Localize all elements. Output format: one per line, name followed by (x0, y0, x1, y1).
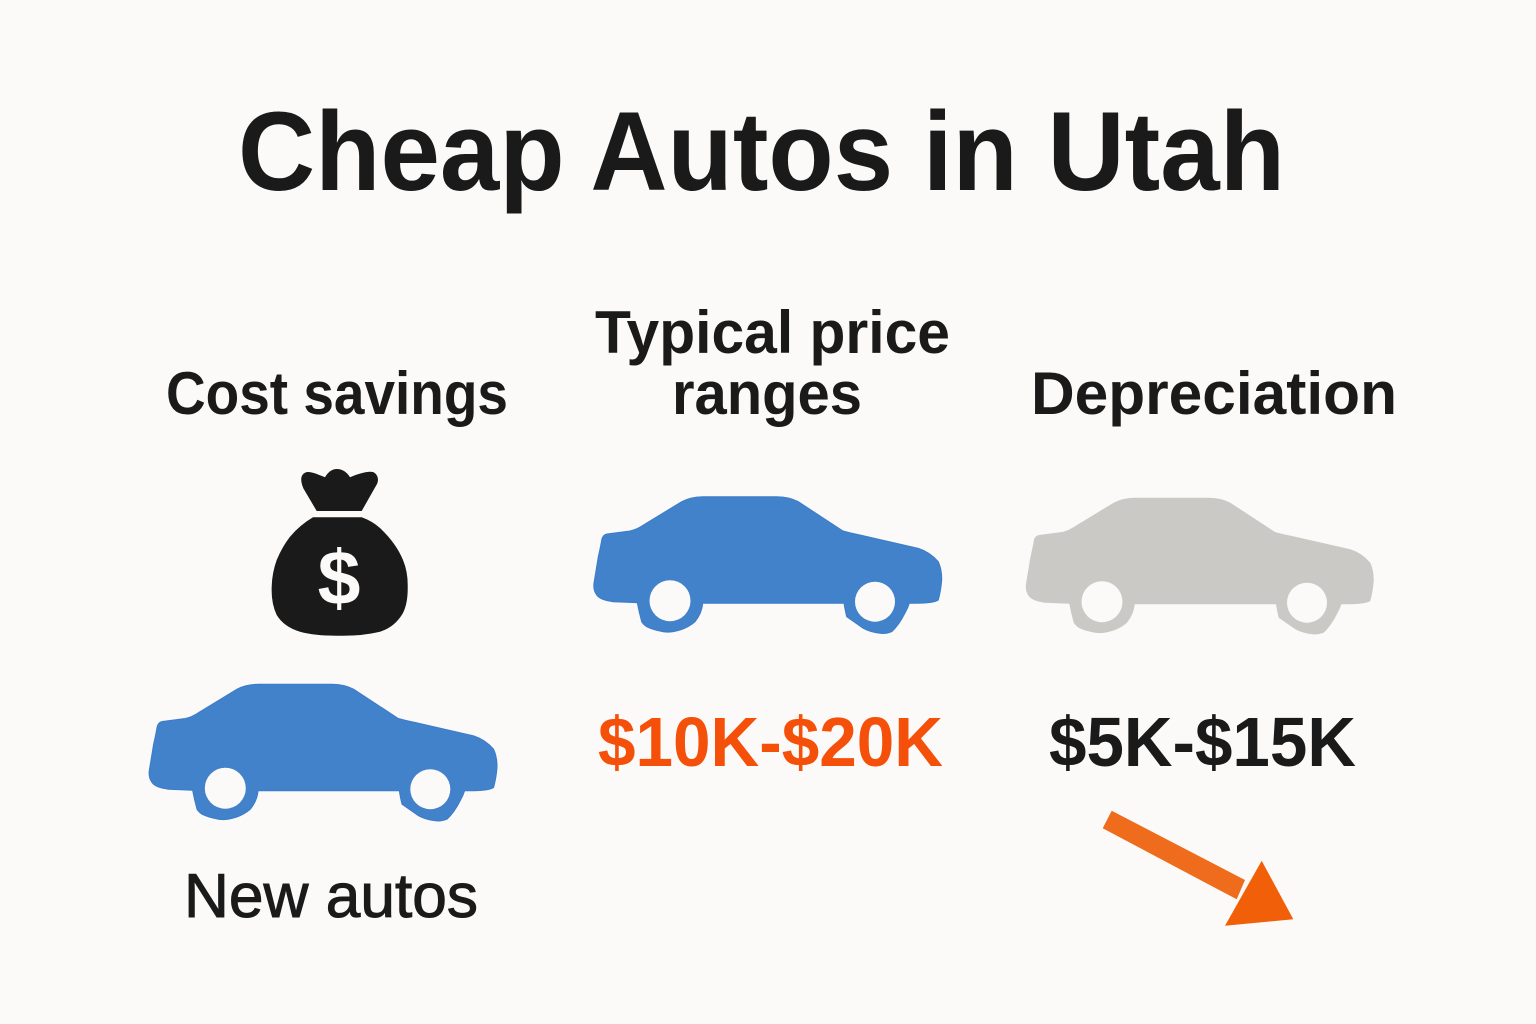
heading: typical price ranges (595, 299, 950, 427)
label: new autos: New autos (184, 862, 478, 931)
panel: typical price ranges (594, 299, 950, 781)
icon: grey car (1026, 498, 1374, 634)
heading: depreciation: Depreciation (1031, 360, 1397, 427)
icon: money bag (272, 469, 408, 636)
price: $5K-$15K: $5K-$15K (1049, 703, 1356, 781)
heading: typical price ranges: Typical price (595, 299, 950, 366)
icon: money bag: $ (318, 536, 360, 622)
icon: blue car (new autos) (149, 684, 497, 821)
arrow: downward trend (1103, 811, 1293, 926)
price: $10K-$20K: $10K-$20K (598, 703, 943, 781)
title: Cheap Autos in Utah (238, 89, 1285, 214)
panel: cost savings (149, 360, 508, 931)
heading: cost savings: Cost savings (166, 360, 508, 427)
panel: depreciation (1026, 360, 1397, 926)
heading: typical price ranges: ranges (672, 360, 862, 427)
icon: blue car (594, 497, 942, 633)
